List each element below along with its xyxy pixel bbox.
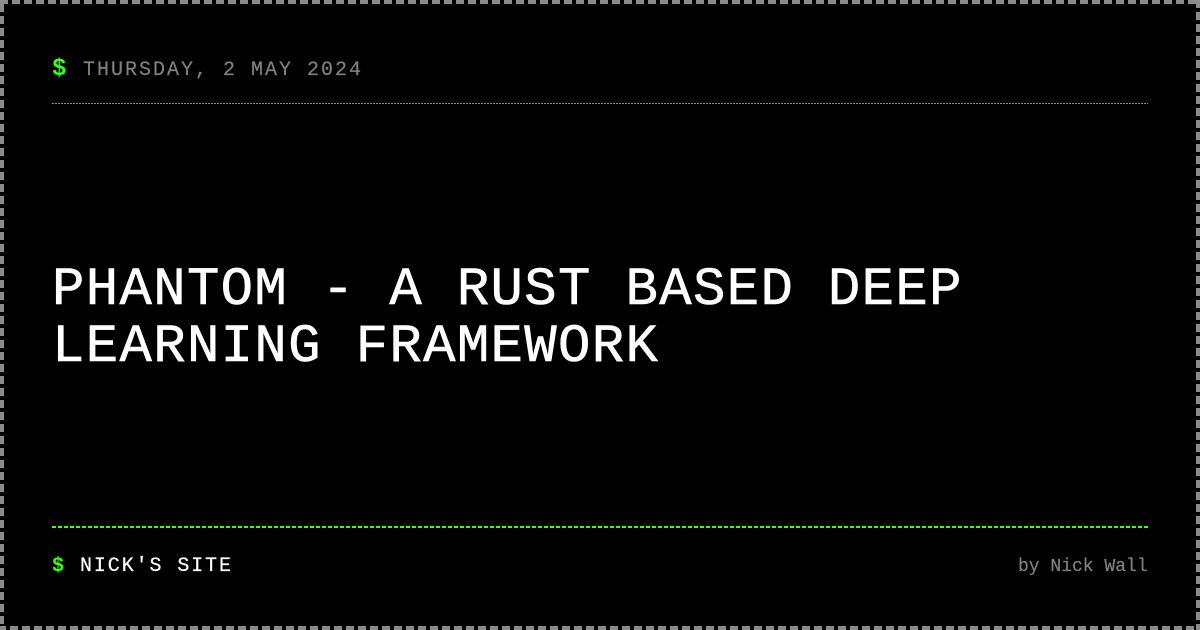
site name [52, 555, 233, 578]
title: PHANTOM - A RUST BASED DEEP LEARNING FRAMEWORK [52, 260, 963, 378]
byline: by Nick Wall [1018, 557, 1148, 577]
date text: THURSDAY, 2 MAY 2024 [83, 59, 363, 82]
bottom green divider [52, 526, 1148, 528]
site name text: NICK'S SITE [80, 555, 233, 578]
top divider [52, 103, 1148, 104]
icon: green dollar prompt: $ [52, 56, 66, 83]
icon: green dollar prompt: $ [52, 555, 64, 578]
date line [52, 56, 363, 83]
